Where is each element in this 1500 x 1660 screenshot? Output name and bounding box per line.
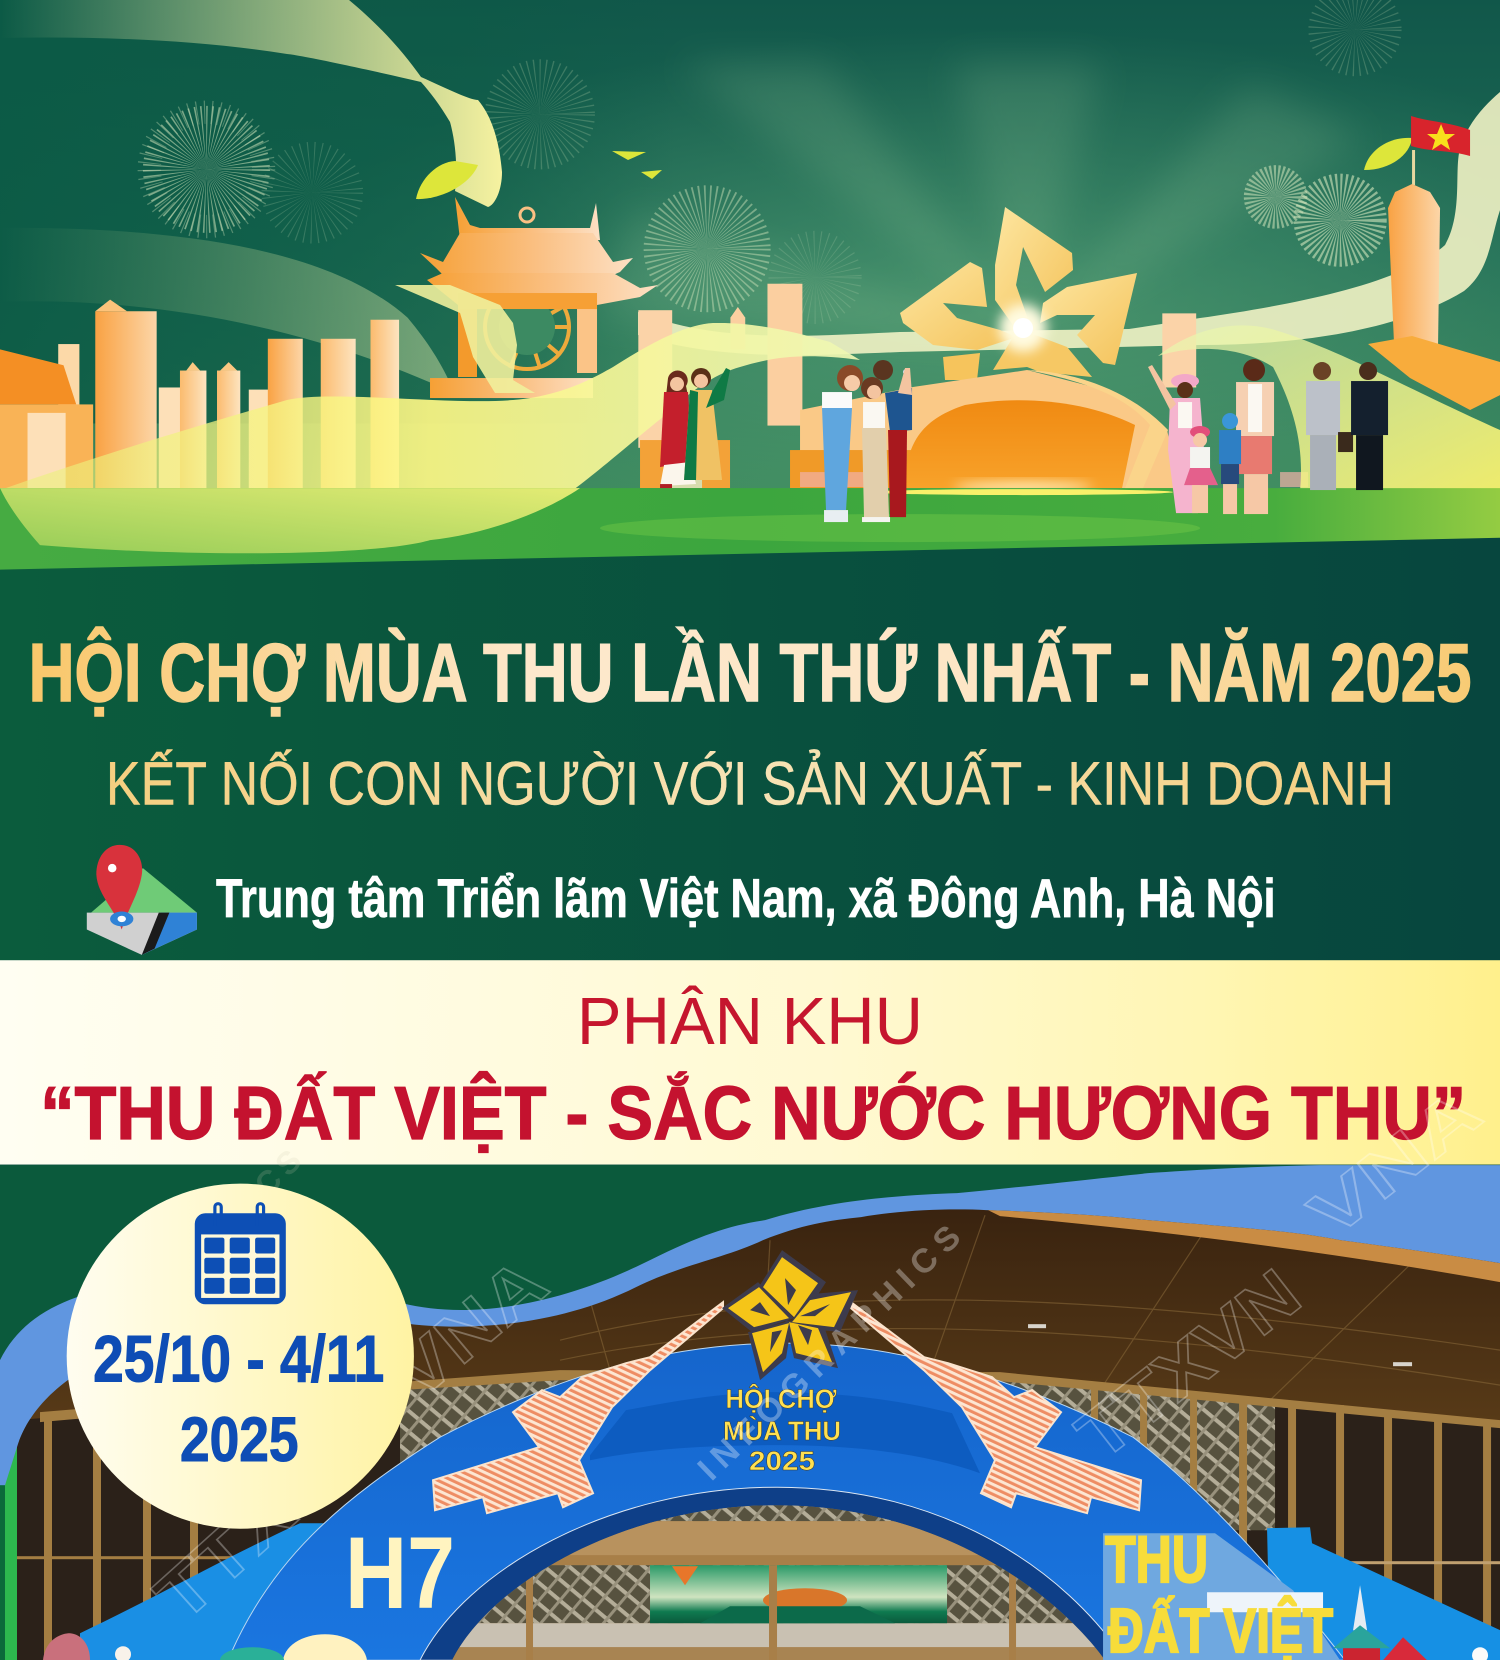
people: businessmen	[1306, 362, 1388, 490]
watermarks: VNA	[378, 1242, 562, 1414]
watermarks: INFOGRAPHICS	[62, 1142, 308, 1381]
arch opening	[420, 1487, 1125, 1660]
venue section	[0, 1165, 1500, 1660]
blue wave	[0, 1165, 1500, 1660]
interior	[440, 1500, 1120, 1660]
roof edge	[986, 1209, 1500, 1282]
year: 2025	[180, 1405, 299, 1475]
pagoda tower sign	[1333, 1585, 1488, 1660]
people: family	[1148, 359, 1274, 514]
zone label: PHÂN KHU	[577, 985, 923, 1059]
photo: gate	[0, 1200, 1500, 1660]
watermarks: INFOGRAPHICS	[691, 1218, 968, 1488]
watermarks: TTXVN	[1062, 1254, 1315, 1475]
dark green title panel	[0, 538, 1500, 960]
arch fair text: 2025	[749, 1446, 815, 1476]
left green strip	[0, 1447, 17, 1660]
leaves	[416, 138, 1412, 199]
flower monument	[900, 207, 1137, 380]
LED screen	[650, 1565, 947, 1660]
hero illustration	[0, 0, 1500, 572]
people: selfie group	[822, 360, 912, 522]
side panel right	[1267, 1527, 1500, 1660]
yellow waves	[0, 323, 1500, 509]
side panel left	[80, 1523, 324, 1660]
central hall	[640, 370, 1308, 492]
watermarks: VNA	[1295, 1074, 1495, 1252]
arch	[228, 1343, 1345, 1660]
ceiling lights	[490, 1320, 1412, 1366]
arch fair text: HỘI CHỢ	[726, 1383, 837, 1414]
wall columns	[17, 1370, 1500, 1660]
arch dark band	[590, 1392, 980, 1473]
light rays	[593, 64, 1366, 339]
right wing ornament	[851, 1302, 1141, 1513]
yellow zone banner	[0, 960, 1500, 1165]
pagoda	[395, 197, 658, 398]
flower logo	[722, 1250, 858, 1380]
mid-left ribbon	[0, 228, 455, 394]
date badge	[67, 1184, 414, 1529]
date range: 25/10 - 4/11	[93, 1323, 384, 1396]
arch fair text	[723, 1383, 841, 1476]
ceiling lines	[560, 1215, 1500, 1400]
icon: map pin	[87, 845, 197, 955]
fireworks	[149, 6, 1378, 301]
text: H7: H7	[345, 1516, 455, 1630]
bottom left figures	[43, 1633, 367, 1660]
arch fair text: MÙA THU	[723, 1415, 841, 1446]
arch sign	[1103, 1522, 1340, 1660]
dark wall	[17, 1375, 1500, 1660]
ground	[0, 488, 1500, 570]
top-left ribbon	[0, 0, 502, 207]
skyline	[0, 284, 1196, 489]
left wing ornament	[433, 1302, 723, 1513]
arch sign: THU	[1105, 1522, 1208, 1596]
flag tower	[1368, 116, 1500, 410]
lattice panels	[400, 1378, 1275, 1530]
watermarks	[62, 1074, 1495, 1636]
right ribbon and light band	[638, 92, 1500, 355]
people: ao dai women	[660, 368, 730, 488]
icon: calendar	[195, 1204, 286, 1304]
watermarks: TTXVN	[140, 1394, 397, 1636]
